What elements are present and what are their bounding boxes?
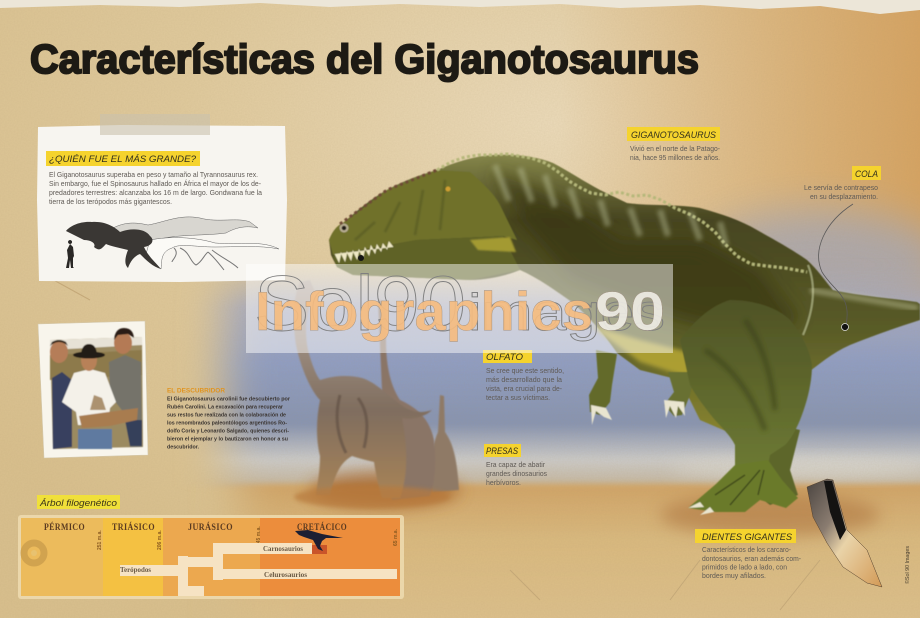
watermark: 90 [595,280,665,342]
period labels [44,522,347,532]
icon: dinosaur silhouette [295,530,343,551]
sauropod middle [370,300,435,500]
photo: discoverers [38,321,148,458]
watermark: Infographics [255,280,593,342]
heading: phylogenetic tree [37,495,120,509]
label: giant teeth: bordes muy afilados. [702,571,766,580]
teeth [335,242,393,262]
text block: largest: predadores terrestres: alcanzaba los 16 m de largo. Gondwana fue la [49,188,263,197]
illustration: Giganotosaurus [329,154,920,515]
neck pale stripes [495,165,726,246]
person center [78,429,112,449]
time markers: 251 m.a. [97,530,103,550]
panel: who was the largest [37,114,287,282]
text block: discoverer: bieron el ejemplar y lo bautizaron en honor a su [167,436,289,442]
label: smell: tectar a sus víctimas. [486,393,550,402]
person left [52,372,72,449]
far leg [750,420,800,505]
credit: ©Sol 90 Images [904,545,911,584]
label: giant teeth: primidos de lado a lado, con [702,562,787,572]
arm near [589,350,617,415]
text block: discoverer: El Giganotosaurus carolinii fue descubierto por [167,396,291,402]
heading: phylogenetic tree: Árbol filogenético [39,498,117,509]
text block: discoverer: EL DESCUBRIDOR [167,388,226,394]
watermark: Sol90 [254,259,466,347]
sauropod small [431,395,459,492]
text block: discoverer: descubridor. [167,444,199,450]
text block: discoverer [167,388,291,450]
illustration: sauropods [294,280,460,508]
chart: phylogenetic timeline [18,515,404,599]
chart: size comparison silhouettes [66,217,279,270]
text block: largest [49,170,263,206]
chart: phylogenetic timeline: Carnosaurios [263,545,303,553]
label: smell: Se cree que este sentido, [486,366,564,375]
head [329,170,517,255]
label: giant teeth: Característicos de los carcaro- [702,545,792,554]
sauropod front [294,280,432,498]
label: giant teeth [695,529,802,580]
text block: discoverer: los renombrados paleontólogos argentinos Ro- [167,420,287,426]
foot [688,460,798,512]
label: Giganotosaurus [627,127,721,162]
label: smell: OLFATO [486,352,524,363]
thigh and leg [680,300,812,485]
dark shoulder shading [490,170,800,340]
label: tail: COLA [855,169,878,180]
marker: snout pointer [358,255,364,261]
chart: phylogenetic timeline: Celurosaurios [264,571,307,579]
time markers: 65 m.a. [393,528,399,546]
belly yellow [590,325,700,378]
title: Características del Giganotosaurus [30,36,699,82]
text block: discoverer: sus restos fue realizada con la colaboración de [167,412,286,418]
branches [120,543,397,596]
label: tail [804,166,881,201]
tail and body [329,155,920,450]
label: prey [484,444,547,487]
heading: largest [46,151,200,166]
period labels: PÉRMICO [44,522,85,532]
label: giant teeth: dontosaurios, eran además com- [702,554,802,563]
fossil held [79,408,138,428]
spines crest [437,154,807,272]
time markers: 206 m.a. [157,530,163,550]
watermark: images [468,284,665,342]
chart: phylogenetic timeline: Terópodos [120,566,151,574]
label: smell: vista, era crucial para de- [486,384,563,393]
text block: discoverer: dolfo Coria y Leonardo Salgado, quienes descri- [167,428,289,434]
label: prey: Era capaz de abatir [486,460,546,469]
label: tail: Le servía de contrapeso [804,183,878,192]
text block: discoverer: Rubén Carolini. La excavación para recuperar [167,404,284,410]
arm far [664,372,695,416]
label: giant teeth: DIENTES GIGANTES [702,532,793,543]
icon: stamp circle [24,543,44,563]
time markers [97,526,399,550]
label: Giganotosaurus: Vivió en el norte de la Patago- [630,144,721,153]
label: smell: más desarrollado que la [486,375,563,384]
watermark [246,259,673,353]
arrow: tail pointer [819,204,853,330]
icon: human silhouette [66,240,74,268]
period labels: CRETÁCICO [297,522,347,532]
heading: largest: ¿QUIÉN FUE EL MÁS GRANDE? [49,154,197,165]
label: tail: en su desplazamiento. [810,192,878,201]
eye [340,224,348,232]
period labels: TRIÁSICO [112,522,155,532]
period labels: JURÁSICO [188,522,233,532]
label: Giganotosaurus: nia, hace 95 millones de años. [630,153,720,162]
label: prey: grandes dinosaurios [486,469,547,478]
person right [109,355,142,447]
label: Giganotosaurus: GIGANOTOSAURUS [631,130,717,141]
label: prey: herbívoros. [486,478,521,487]
label: prey: PRESAS [486,446,519,457]
text block: largest: tierra de los terópodos más gigantescos. [49,197,172,206]
time markers: 145 m.a. [256,526,262,546]
text block: largest: El Giganotosaurus superaba en peso y tamaño al Tyrannosaurus rex. [49,170,258,179]
text block: largest: Sin embargo, fue el Spinosaurus hallado en África el mayor de los de- [49,179,262,188]
icon: fossil tooth [807,479,882,587]
label: smell [483,350,564,402]
